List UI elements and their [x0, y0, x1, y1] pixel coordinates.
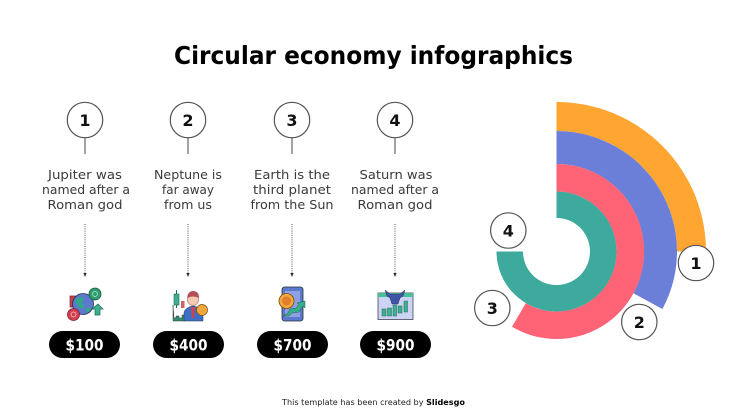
chart marker 3: 3: [487, 299, 498, 318]
column 2: [153, 102, 224, 358]
icon: trader with chart: [173, 290, 208, 321]
text: Neptune: Neptune is: [154, 167, 222, 182]
chart marker 1: 1: [690, 254, 702, 273]
arrow 2: [186, 224, 190, 277]
arc 1: orange: [556, 102, 706, 252]
column 4: [351, 102, 439, 358]
text: Jupiter: Roman god: [48, 197, 122, 212]
number marker 4: 4: [389, 111, 401, 130]
value pill 3: [257, 331, 328, 358]
column 3: [250, 102, 334, 358]
value pill 3: $700: [274, 336, 312, 354]
text: Earth: from the Sun: [250, 197, 334, 212]
text: Neptune: from us: [164, 197, 212, 212]
chart marker 1: [678, 245, 714, 281]
arrow 4: [393, 224, 397, 277]
value pill 1: $100: [66, 336, 104, 354]
chart marker 2: [622, 304, 657, 340]
arrow 3: [290, 224, 294, 277]
number marker 2: 2: [182, 111, 194, 130]
chart marker 4: [491, 213, 526, 248]
value pill 4: [360, 331, 431, 358]
text: Jupiter: Jupiter was: [47, 167, 122, 182]
arrow 1: [83, 224, 87, 277]
text: Earth: third planet: [253, 182, 331, 197]
value pill 4: $900: [376, 336, 414, 354]
text: Neptune: far away: [162, 182, 215, 197]
value pill 2: $400: [170, 336, 208, 354]
icon: phone with bitcoin: [279, 287, 305, 321]
chart marker 2: 2: [634, 313, 645, 332]
number marker 3: [274, 102, 310, 154]
number marker 1: [67, 102, 103, 154]
arc 3: red: [512, 164, 644, 339]
icon: market window with bull: [378, 290, 413, 320]
number marker 1: 1: [79, 111, 91, 130]
number marker 2: [170, 102, 206, 154]
value pill 2: [153, 331, 224, 358]
chart marker 4: 4: [503, 222, 514, 240]
text: Earth: Earth is the: [254, 167, 330, 182]
text: Saturn: Saturn was: [360, 167, 432, 182]
arc 4: teal: [496, 192, 617, 312]
text: Saturn: named after a: [351, 182, 439, 197]
arc 2: blue: [556, 131, 677, 309]
text: Saturn: Roman god: [358, 197, 432, 212]
value pill 1: [49, 331, 120, 358]
number marker 3: 3: [286, 111, 298, 130]
chart marker 3: [475, 290, 510, 326]
icon: globe and coins: [68, 288, 103, 320]
number marker 4: [377, 102, 413, 154]
footer credit: This template has been created by Slidesgo: [281, 398, 465, 407]
title: Circular economy infographics: [174, 41, 573, 70]
text: Jupiter: named after a: [42, 182, 130, 197]
radial bar chart: [475, 102, 714, 340]
column 1: [42, 102, 130, 358]
